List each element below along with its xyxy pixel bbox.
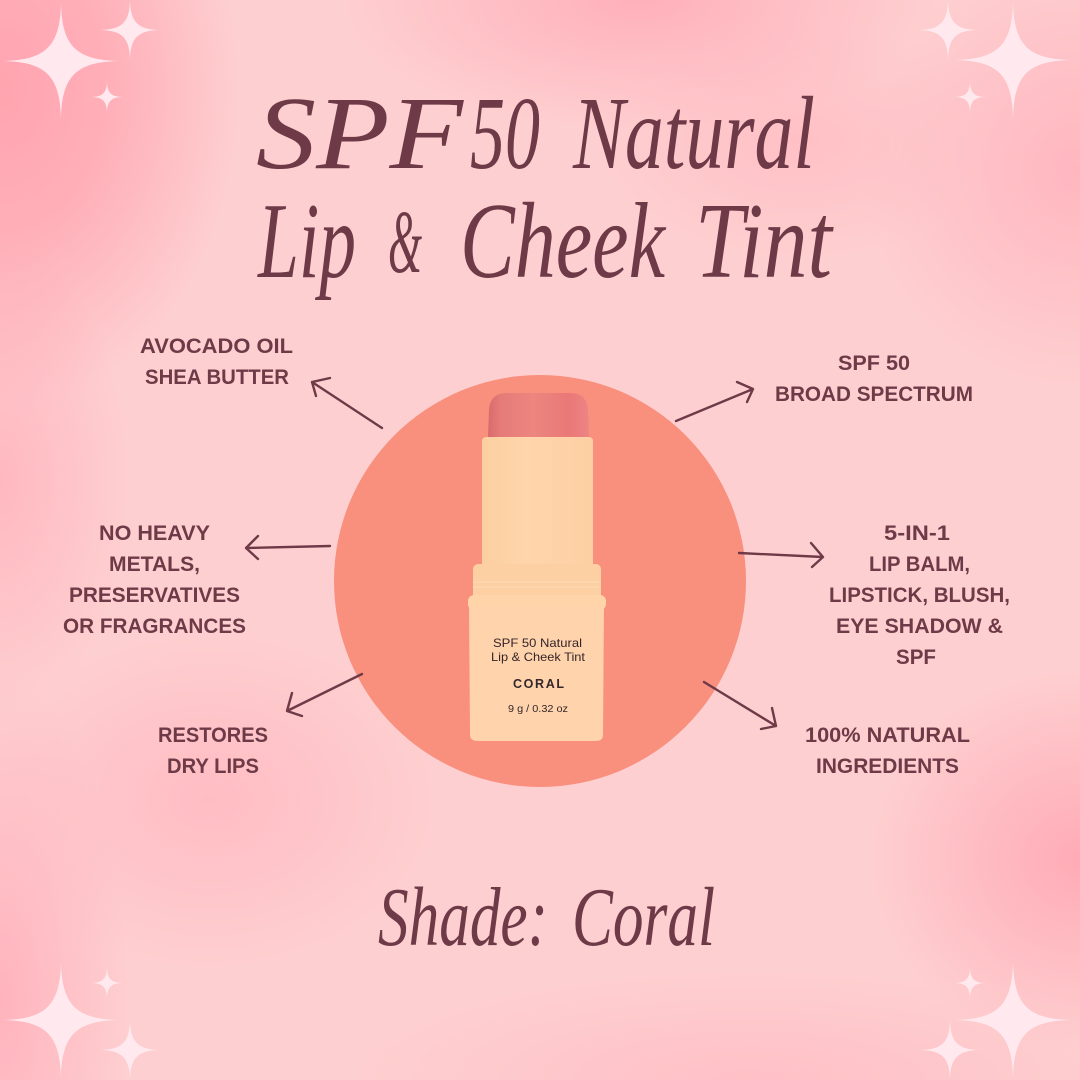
sparkles: bottom right [920,962,1071,1080]
product: lip and cheek tint stick [468,393,606,741]
subtitle: shade coral [378,871,715,964]
feature: 100% natural ingredients: INGREDIENTS [816,755,959,778]
feature: SPF 50 broad spectrum: SPF 50 [838,352,910,375]
subtitle: shade coral: Shade: [378,871,548,964]
feature: 5-in-1: SPF [896,646,936,669]
collar groove [473,582,601,587]
coral circle [334,375,746,787]
feature: no heavy metals [63,522,246,638]
title: Tint [695,182,834,301]
label text [491,636,586,715]
tint bullet [488,393,589,437]
arrow: to no heavy metals [246,536,330,559]
feature: avocado oil, shea butter [140,335,293,389]
label text: 9 g / 0.32 oz [508,704,568,715]
feature: 5-in-1: LIPSTICK, BLUSH, [829,584,1010,607]
tube collar [473,564,601,597]
arrow: to 100% natural [704,682,776,729]
label text: CORAL [513,677,564,691]
feature: avocado oil, shea butter: SHEA BUTTER [145,366,289,389]
collar rim [468,595,606,610]
sparkles: top right [918,0,1071,118]
title: Natural [572,76,815,191]
feature: 5-in-1: EYE SHADOW & [836,615,1003,638]
arrow: to restores [287,674,362,716]
title: Lip [257,182,356,301]
arrow: to SPF 50 [676,382,753,421]
feature: 5-in-1 [829,522,1010,669]
subtitle: shade coral: Coral [572,871,715,964]
tube sleeve [482,437,593,566]
feature: restores dry lips [158,724,268,778]
feature: no heavy metals: NO HEAVY [99,522,210,545]
feature: 100% natural ingredients: 100% NATURAL [805,724,970,747]
feature: SPF 50 broad spectrum [775,352,973,406]
feature: SPF 50 broad spectrum: BROAD SPECTRUM [775,383,973,406]
feature: no heavy metals: OR FRAGRANCES [63,615,246,638]
feature: 5-in-1: LIP BALM, [869,553,970,576]
sparkles: top left [3,0,160,119]
feature: restores dry lips: DRY LIPS [167,755,259,778]
label text: Lip & Cheek Tint [491,650,586,664]
title: Cheek [460,182,667,301]
title [256,76,834,301]
feature: restores dry lips: RESTORES [158,724,268,747]
arrow: to avocado oil [312,378,382,428]
sparkles: bottom left [3,962,160,1080]
title: 50 [470,76,540,191]
title: & [388,193,422,292]
feature: 100% natural ingredients [805,724,970,778]
feature: avocado oil, shea butter: AVOCADO OIL [140,335,293,358]
feature: no heavy metals: PRESERVATIVES [69,584,240,607]
label text: SPF 50 Natural [493,636,582,650]
feature: no heavy metals: METALS, [109,553,200,576]
title: SPF [256,76,465,191]
tube base [469,606,604,741]
arrow: to 5-in-1 [739,543,823,567]
feature: 5-in-1: 5-IN-1 [884,522,950,545]
